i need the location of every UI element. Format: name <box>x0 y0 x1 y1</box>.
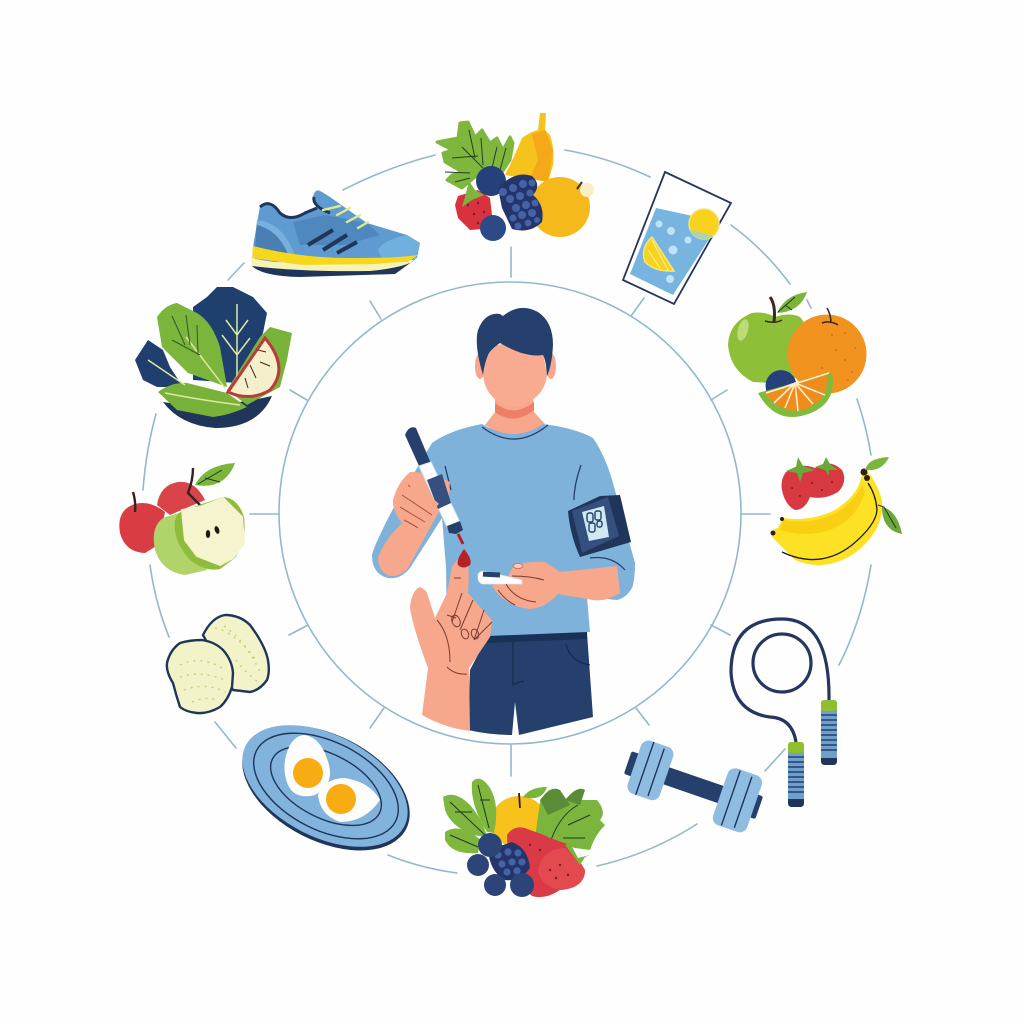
lower arm, hand and test strip <box>492 562 620 609</box>
icon: glass of lemon water <box>623 172 731 304</box>
armband monitor <box>568 495 631 557</box>
raised arm and hand <box>378 472 450 576</box>
icon: strawberries and banana <box>770 457 902 565</box>
blood drop <box>458 549 471 568</box>
icon: plate with eggs <box>222 700 430 876</box>
icon: apples <box>119 463 245 575</box>
icon: apple, orange and citrus slice <box>728 292 866 417</box>
icon: running shoe <box>251 190 420 277</box>
icon: dumbbell <box>618 734 769 836</box>
icon: berries and greens cluster, bottom <box>443 779 605 897</box>
central figure: man testing blood glucose <box>372 308 635 735</box>
icon: jump rope <box>731 619 837 807</box>
lancet pen <box>405 427 463 544</box>
icon: leafy salad bowl <box>135 287 292 428</box>
t-shirt <box>372 424 635 637</box>
jeans <box>468 633 593 735</box>
icon: fruit and berry cluster, top <box>437 113 594 241</box>
hand with pricked finger <box>410 558 492 731</box>
icon: sliced potato <box>167 615 269 713</box>
neck and head <box>475 308 556 435</box>
